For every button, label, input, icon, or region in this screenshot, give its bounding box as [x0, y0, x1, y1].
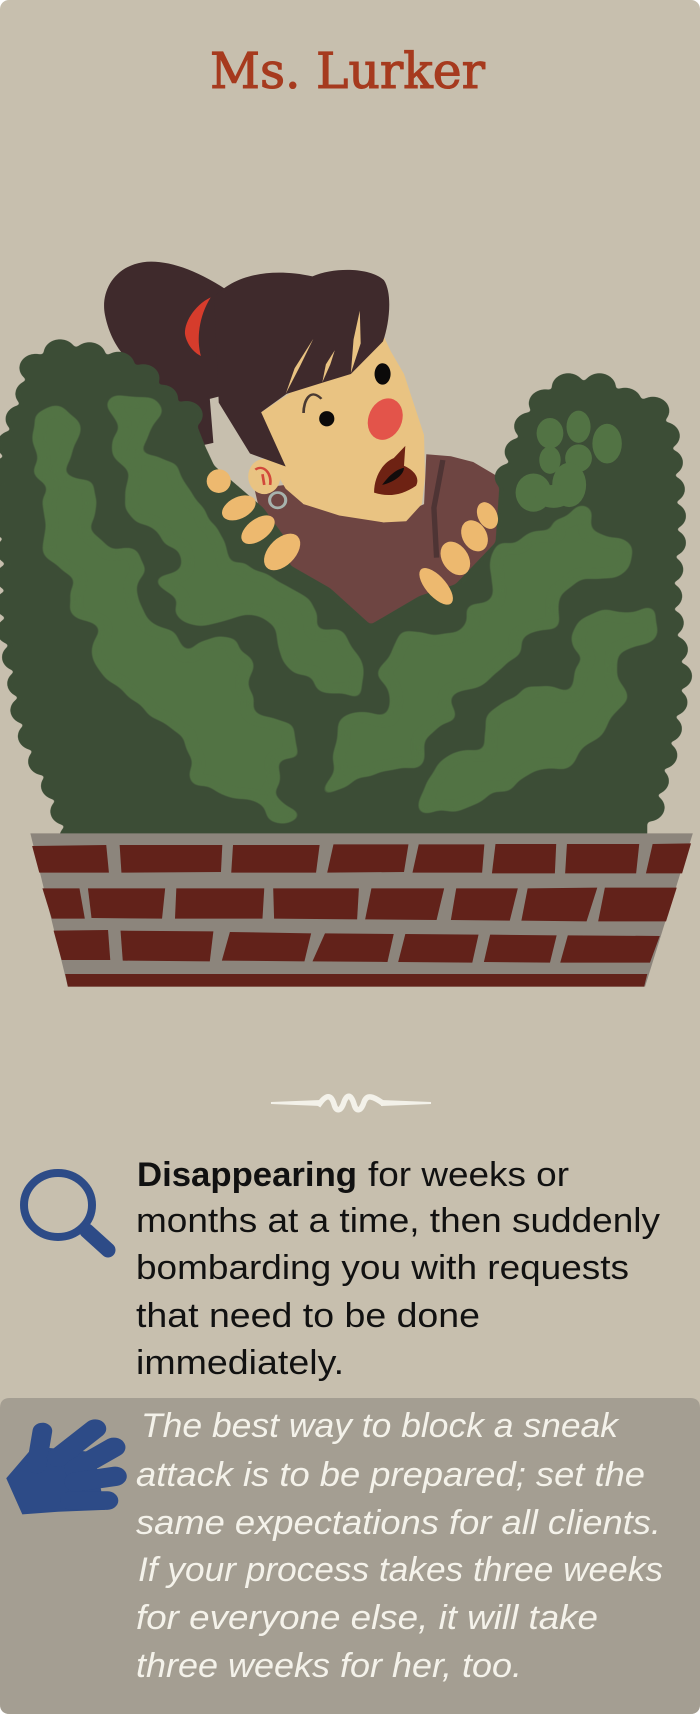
hedge: dark foliage [7, 351, 676, 837]
icon: blue hand [6, 1429, 115, 1514]
earring [270, 493, 286, 508]
advice text: If your process takes three weeks [138, 1551, 663, 1589]
panel: advice [0, 1398, 700, 1714]
description text: bombarding you with requests [136, 1249, 629, 1287]
brick planter [30, 833, 693, 987]
icon: magnifying glass [24, 1173, 108, 1250]
bang highlights [286, 311, 361, 394]
description text: for weeks or [368, 1156, 569, 1194]
eyebrow [304, 394, 321, 413]
advice text: for everyone else, it will take [136, 1599, 598, 1637]
ponytail [104, 262, 232, 447]
description text: immediately. [136, 1344, 344, 1382]
flourish divider [271, 1096, 431, 1110]
panel background [0, 1398, 700, 1714]
illustration: woman peeking over a hedge [7, 262, 676, 837]
advice text: same expectations for all clients. [136, 1504, 661, 1542]
shirt strap [434, 460, 443, 558]
title: Ms. Lurker [210, 42, 485, 100]
advice text [136, 1407, 663, 1685]
hair band [185, 297, 211, 356]
description text: months at a time, then suddenly [136, 1202, 660, 1240]
hedge: light foliage [38, 399, 650, 818]
face [261, 332, 425, 522]
advice text: attack is to be prepared; set the [136, 1456, 645, 1494]
description text [136, 1156, 660, 1382]
description text: that need to be done [136, 1297, 480, 1335]
description text: Disappearing [137, 1156, 357, 1194]
eyes [319, 363, 391, 426]
mortar [30, 833, 693, 987]
advice text: The best way to block a sneak [141, 1407, 620, 1445]
advice text: three weeks for her, too. [136, 1647, 522, 1685]
hedge: upper right light leaves [516, 411, 622, 512]
ear [248, 459, 280, 494]
shirt [254, 454, 509, 630]
hair [214, 270, 389, 467]
mouth [374, 446, 417, 495]
fingers [207, 469, 502, 609]
bricks [32, 843, 691, 987]
cheek [363, 395, 408, 443]
